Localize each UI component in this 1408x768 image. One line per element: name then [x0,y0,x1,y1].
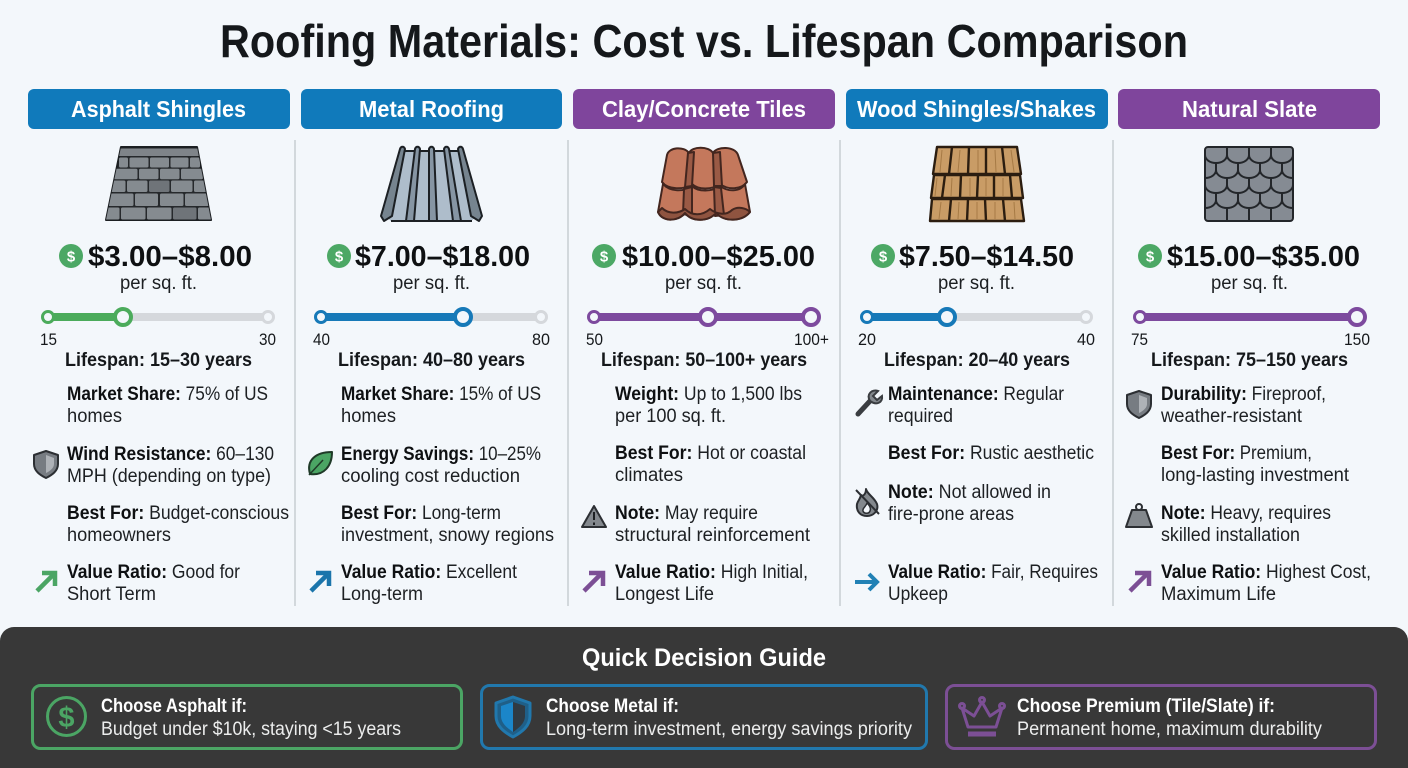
note [1161,503,1331,546]
heading: Clay/Concrete Tiles: Clay/Concrete Tiles [602,96,806,122]
icon: asphalt shingles roof [104,147,212,220]
lifespan slider: 40 [1077,331,1095,349]
guide heading: Quick Decision Guide [582,644,826,672]
value ratio: Upkeep [888,584,948,605]
lifespan slider [858,309,1095,349]
value ratio [1161,562,1371,605]
value ratio: Value Ratio: Fair, Requires [888,562,1098,583]
best for: Best For: Long-term [341,503,501,524]
heading: Asphalt Shingles: Asphalt Shingles [71,96,246,122]
market share: Market Share: 15% of US [341,384,541,405]
value ratio: Maximum Life [1161,584,1276,605]
unit: per sq. ft. [1211,273,1288,294]
panel: Quick Decision Guide [0,627,1408,768]
lifespan: Lifespan: 40–80 years [338,350,525,371]
lifespan slider: 40 [313,331,330,349]
lifespan slider [40,309,276,349]
note: Note: May require [615,503,758,524]
lifespan: Lifespan: 15–30 years [65,350,252,371]
lifespan slider [1131,309,1370,349]
icon: arrow up-right [311,573,329,591]
price: $7.00–$18.00 [355,241,530,273]
durability [1160,384,1326,427]
icon: shield [1127,391,1151,418]
card text [1017,696,1322,740]
icon: shield [34,451,58,478]
price: $15.00–$35.00 [1167,241,1360,273]
unit: per sq. ft. [393,273,470,294]
maintenance: required [888,406,953,427]
market share: homes [341,406,396,427]
durability: Durability: Fireproof, [1161,384,1326,405]
panel: Wood Shingles/Shakes [846,89,1108,605]
note: structural reinforcement [615,525,811,546]
best for [67,503,289,546]
best for [341,503,554,546]
value ratio: Value Ratio: Highest Cost, [1161,562,1371,583]
heading: Clay/Concrete Tiles [573,89,835,129]
energy savings: cooling cost reduction [341,466,520,487]
icon: wood shakes [930,147,1024,221]
lifespan slider: 30 [259,331,276,349]
lifespan: Lifespan: 50–100+ years [601,350,807,371]
market share: homes [67,406,122,427]
price: $ [67,248,76,266]
card text: Choose Metal if: [546,696,679,717]
price: $ [335,248,344,266]
best for: Best For: Premium, [1161,443,1312,464]
wind resistance: Wind Resistance: 60–130 [67,444,274,465]
best for [615,443,806,486]
price: $ [600,248,609,266]
card text: Choose Premium (Tile/Slate) if: [1017,696,1275,717]
weight [615,384,802,427]
note [615,503,811,546]
note: Note: Heavy, requires [1161,503,1331,524]
note: skilled installation [1161,525,1300,546]
card text: Long-term investment, energy savings priority [546,719,912,740]
panel: Clay/Concrete Tiles [573,89,835,605]
icon: shield [496,697,530,737]
panel: Metal Roofing [301,89,562,605]
price: $ [1146,248,1155,266]
weight: Weight: Up to 1,500 lbs [615,384,802,405]
icon: wrench [858,391,882,414]
unit: per sq. ft. [120,273,197,294]
note: Note: Not allowed in [888,482,1051,503]
value ratio: Value Ratio: Excellent [341,562,518,583]
value ratio: Longest Life [615,584,714,605]
energy savings: Energy Savings: 10–25% [341,444,541,465]
icon: arrow up-right [37,573,55,591]
value ratio: Value Ratio: Good for [67,562,241,583]
lifespan: Lifespan: 75–150 years [1151,350,1348,371]
heading: Metal Roofing: Metal Roofing [359,96,504,122]
heading: Wood Shingles/Shakes: Wood Shingles/Shakes [857,96,1096,122]
maintenance [888,384,1065,427]
panel: Natural Slate [1118,89,1380,605]
heading: Wood Shingles/Shakes [846,89,1108,129]
wind resistance [67,444,274,487]
best for: long-lasting investment [1161,465,1350,486]
icon: metal roof [381,147,482,221]
title: Roofing Materials: Cost vs. Lifespan Comparison [220,15,1188,67]
card text: Budget under $10k, staying <15 years [101,719,401,740]
lifespan slider [586,309,829,349]
value ratio: Long-term [341,584,423,605]
best for: Best For: Rustic aesthetic [888,443,1094,464]
market share: Market Share: 75% of US [67,384,268,405]
lifespan slider: 100+ [794,331,829,349]
card text: Choose Asphalt if: [101,696,247,717]
market share [67,384,268,427]
note: fire-prone areas [888,504,1014,525]
value ratio: Value Ratio: High Initial, [615,562,808,583]
value ratio: Short Term [67,584,156,605]
value ratio [615,562,808,605]
icon: arrow up-right [584,573,603,591]
lifespan slider: 20 [858,331,876,349]
weight: per 100 sq. ft. [615,406,726,427]
card: Choose Asphalt [32,686,462,748]
price: $3.00–$8.00 [88,241,252,273]
icon: warning triangle [582,506,606,527]
icon: clay tiles [658,148,750,220]
note [888,482,1051,525]
price: $10.00–$25.00 [622,241,815,273]
icon: arrow up-right [1130,573,1149,591]
unit: per sq. ft. [665,273,742,294]
icon: slate roof [1204,146,1294,222]
card: Choose Premium [946,686,1376,748]
icon: dollar [48,698,86,736]
lifespan slider [313,309,550,349]
value ratio [67,562,241,605]
best for: Best For: Hot or coastal [615,443,806,464]
best for [1161,443,1350,486]
best for: investment, snowy regions [341,525,554,546]
icon: arrow right [855,574,877,590]
best for: climates [615,465,683,486]
market share [341,384,541,427]
icon: weight [1126,504,1152,527]
panel: Asphalt Shingles [28,89,290,605]
lifespan slider: 15 [40,331,57,349]
best for: homeowners [67,525,171,546]
card text [546,696,912,740]
energy savings [341,444,541,487]
card text [101,696,401,740]
lifespan slider: 50 [586,331,603,349]
heading: Metal Roofing [301,89,562,129]
best for: Best For: Budget-conscious [67,503,289,524]
durability: weather-resistant [1160,406,1303,427]
lifespan slider: 80 [532,331,550,349]
lifespan: Lifespan: 20–40 years [884,350,1070,371]
value ratio [341,562,518,605]
card text: Permanent home, maximum durability [1017,719,1322,740]
icon: dollar: $ [58,702,75,734]
icon: leaf [309,452,332,475]
price: $ [879,248,888,266]
lifespan slider: 75 [1131,331,1148,349]
price: $7.50–$14.50 [899,241,1074,273]
icon: no fire [856,489,879,516]
heading: Natural Slate: Natural Slate [1182,96,1317,122]
maintenance: Maintenance: Regular [888,384,1065,405]
icon: crown [960,698,1004,734]
heading: Asphalt Shingles [28,89,290,129]
heading: Natural Slate [1118,89,1380,129]
unit: per sq. ft. [938,273,1015,294]
wind resistance: MPH (depending on type) [67,466,271,487]
card: Choose Metal [482,686,926,748]
value ratio [888,562,1098,605]
lifespan slider: 150 [1344,331,1370,349]
